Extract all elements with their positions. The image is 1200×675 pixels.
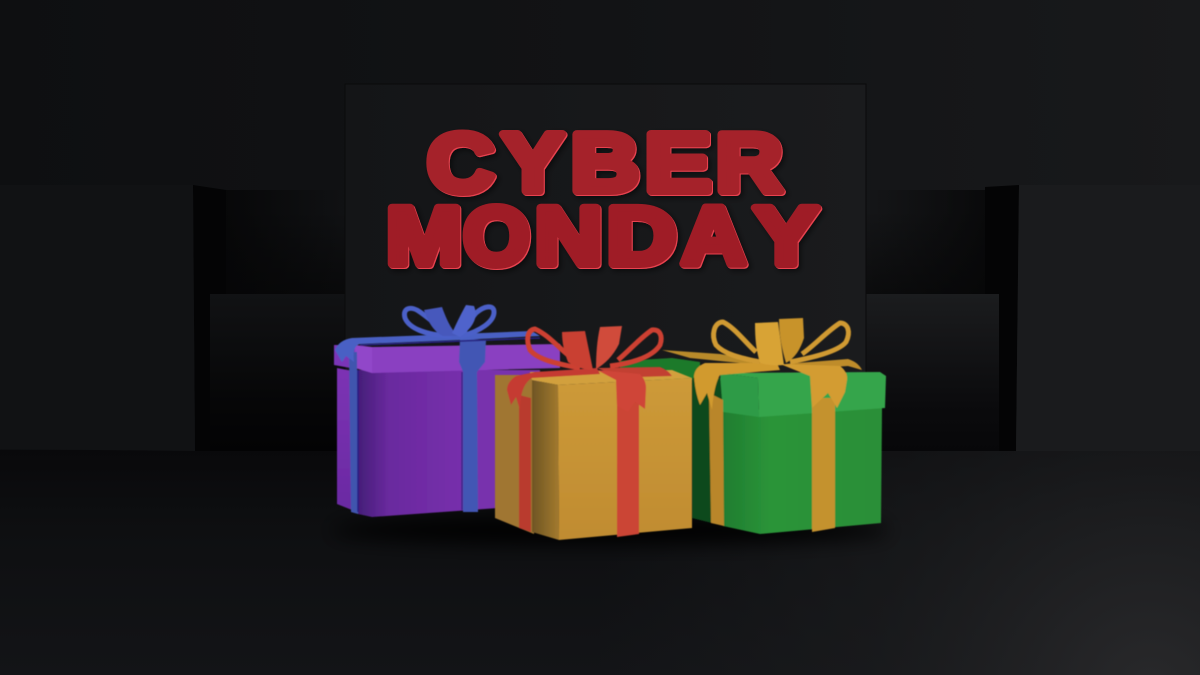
- back low block left: [210, 294, 347, 451]
- body rear: [692, 378, 724, 526]
- ribbon tail left: [507, 368, 600, 410]
- floor: [0, 450, 1200, 675]
- gift: gold box: [495, 326, 692, 540]
- word: monday: O: [463, 191, 530, 282]
- ribbon top right strip: [785, 359, 862, 370]
- ribbon top: [335, 331, 540, 362]
- title: cyber monday: [386, 116, 818, 282]
- back low block right: [865, 294, 1000, 451]
- center back panel: [345, 84, 866, 384]
- word: cyber: Y: [502, 116, 564, 209]
- ribbon right strip: [597, 367, 672, 377]
- ribbon front: [459, 338, 486, 512]
- ribbon front: [617, 400, 639, 537]
- left block: [0, 185, 345, 451]
- word: cyber: E: [645, 116, 711, 209]
- ribbon left: [519, 395, 531, 532]
- gift shadow on floor: [330, 516, 890, 544]
- bow: [404, 305, 494, 337]
- ribbon left: [349, 352, 358, 514]
- back lid: [620, 358, 700, 380]
- ribbon front: [812, 398, 835, 532]
- right block: [866, 185, 1200, 451]
- word: monday: [386, 191, 818, 282]
- flat ribbon: [662, 350, 755, 364]
- lid: [334, 344, 560, 373]
- bow: [714, 318, 848, 365]
- word: cyber: R: [716, 116, 782, 209]
- bow: [528, 326, 661, 370]
- dark edge: [357, 370, 359, 512]
- front face: [558, 378, 692, 540]
- box side: [337, 368, 362, 514]
- word: monday: A: [681, 191, 746, 282]
- lid side: [720, 373, 759, 417]
- ribbon left: [709, 393, 724, 526]
- lid front: [720, 372, 886, 417]
- ribbon tail right: [780, 364, 847, 408]
- dark face: [532, 380, 559, 540]
- word: monday: M: [386, 191, 462, 282]
- box front: [357, 370, 540, 517]
- word: monday: Y: [754, 191, 818, 282]
- rear face: [495, 375, 534, 534]
- gift: green box: [620, 318, 886, 534]
- ribbon tail right: [597, 370, 646, 412]
- word: cyber: B: [571, 116, 639, 209]
- gift: purple box: [334, 305, 560, 517]
- word: monday: D: [607, 191, 676, 282]
- word: cyber: [427, 116, 782, 209]
- word: monday: N: [535, 191, 602, 282]
- body front: [723, 408, 882, 534]
- background wall: [0, 0, 1200, 451]
- word: cyber: C: [427, 116, 494, 209]
- ribbon tail left: [694, 363, 780, 410]
- top face: [530, 370, 692, 385]
